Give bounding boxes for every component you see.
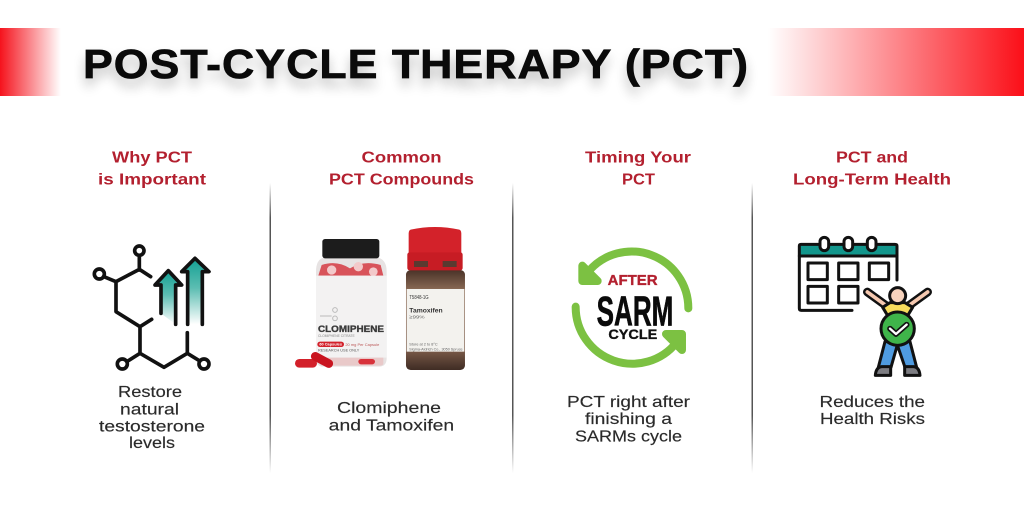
panel: timing your PCT — [567, 150, 691, 446]
description: reduces the health risks: Health Risks — [820, 411, 925, 428]
icon: tamoxifen bottle: Store at 2 to 8°C — [409, 342, 438, 346]
icon: clomiphene bottle: RESEARCH USE ONLY — [318, 347, 360, 352]
icon: after SARM cycle arrows: AFTER — [608, 273, 658, 289]
column divider 1 — [270, 183, 271, 473]
description: restore testosterone — [99, 384, 205, 452]
description: reduces the health risks — [820, 394, 925, 428]
icon: molecule with rising arrows — [94, 246, 209, 369]
icon: tamoxifen bottle — [406, 227, 465, 370]
icon: tamoxifen bottle: ≥99% — [409, 315, 425, 321]
description: PCT after SARMs cycle: PCT right after — [567, 394, 691, 411]
description: PCT after SARMs cycle — [567, 394, 691, 446]
icon: after SARM cycle arrows: CYCLE — [608, 326, 657, 342]
description: reduces the health risks: Reduces the — [820, 394, 925, 411]
description: restore testosterone: testosterone — [99, 418, 205, 436]
icon: after SARM cycle arrows — [576, 252, 688, 364]
heading: common PCT compounds: PCT Compounds — [329, 172, 474, 188]
icon: tamoxifen bottle: Sigma-Aldrich Co., 3050 Spruce — [409, 347, 463, 351]
column divider 2 — [512, 183, 514, 473]
description: clomiphene and tamoxifen — [329, 400, 454, 434]
description: restore testosterone: Restore — [118, 384, 182, 401]
column divider 3 — [752, 183, 753, 473]
icon: tamoxifen bottle: T5848-1G — [409, 295, 429, 301]
heading: why PCT is important: Why PCT — [112, 150, 192, 166]
icon: clomiphene bottle: 20 mg Per Capsule — [345, 342, 380, 347]
heading: timing your PCT: PCT — [622, 172, 655, 188]
icon: tamoxifen bottle: Tamoxifen — [409, 308, 443, 314]
panel: why PCT is important — [94, 150, 209, 452]
title shadow: POST-CYCLE THERAPY (PCT) — [83, 49, 749, 95]
panel: PCT and long-term health — [793, 150, 951, 428]
heading: why PCT is important — [98, 150, 207, 188]
heading: common PCT compounds — [329, 150, 474, 188]
description: PCT after SARMs cycle: finishing a — [585, 411, 672, 428]
heading: common PCT compounds: Common — [362, 150, 442, 166]
icon: clomiphene bottle — [295, 239, 387, 369]
description: restore testosterone: natural — [120, 402, 179, 418]
header band: left red fade — [0, 28, 61, 96]
heading: PCT and long-term health — [793, 150, 951, 188]
header band: right red fade — [768, 28, 1024, 96]
icon: calendar and happy person — [799, 237, 928, 375]
heading: PCT and long-term health: Long-Term Health — [793, 172, 951, 188]
icon: after SARM cycle arrows: SARM — [597, 288, 673, 335]
icon: clomiphene bottle: CLOMIPHENE CITRATE — [318, 334, 355, 338]
description: restore testosterone: levels — [129, 435, 175, 452]
icon: clomiphene bottle: CLOMIPHENE — [318, 324, 384, 334]
heading: PCT and long-term health: PCT and — [836, 150, 908, 166]
icon: clomiphene bottle: 60 Capsules — [319, 343, 342, 347]
description: clomiphene and tamoxifen: Clomiphene — [337, 400, 441, 417]
panel: common PCT compounds — [295, 150, 474, 434]
heading: timing your PCT: Timing Your — [585, 150, 691, 166]
heading: why PCT is important: is Important — [98, 172, 207, 188]
title: POST-CYCLE THERAPY (PCT) — [83, 41, 749, 87]
description: PCT after SARMs cycle: SARMs cycle — [575, 428, 682, 446]
description: clomiphene and tamoxifen: and Tamoxifen — [329, 418, 454, 434]
heading: timing your PCT — [585, 150, 691, 188]
